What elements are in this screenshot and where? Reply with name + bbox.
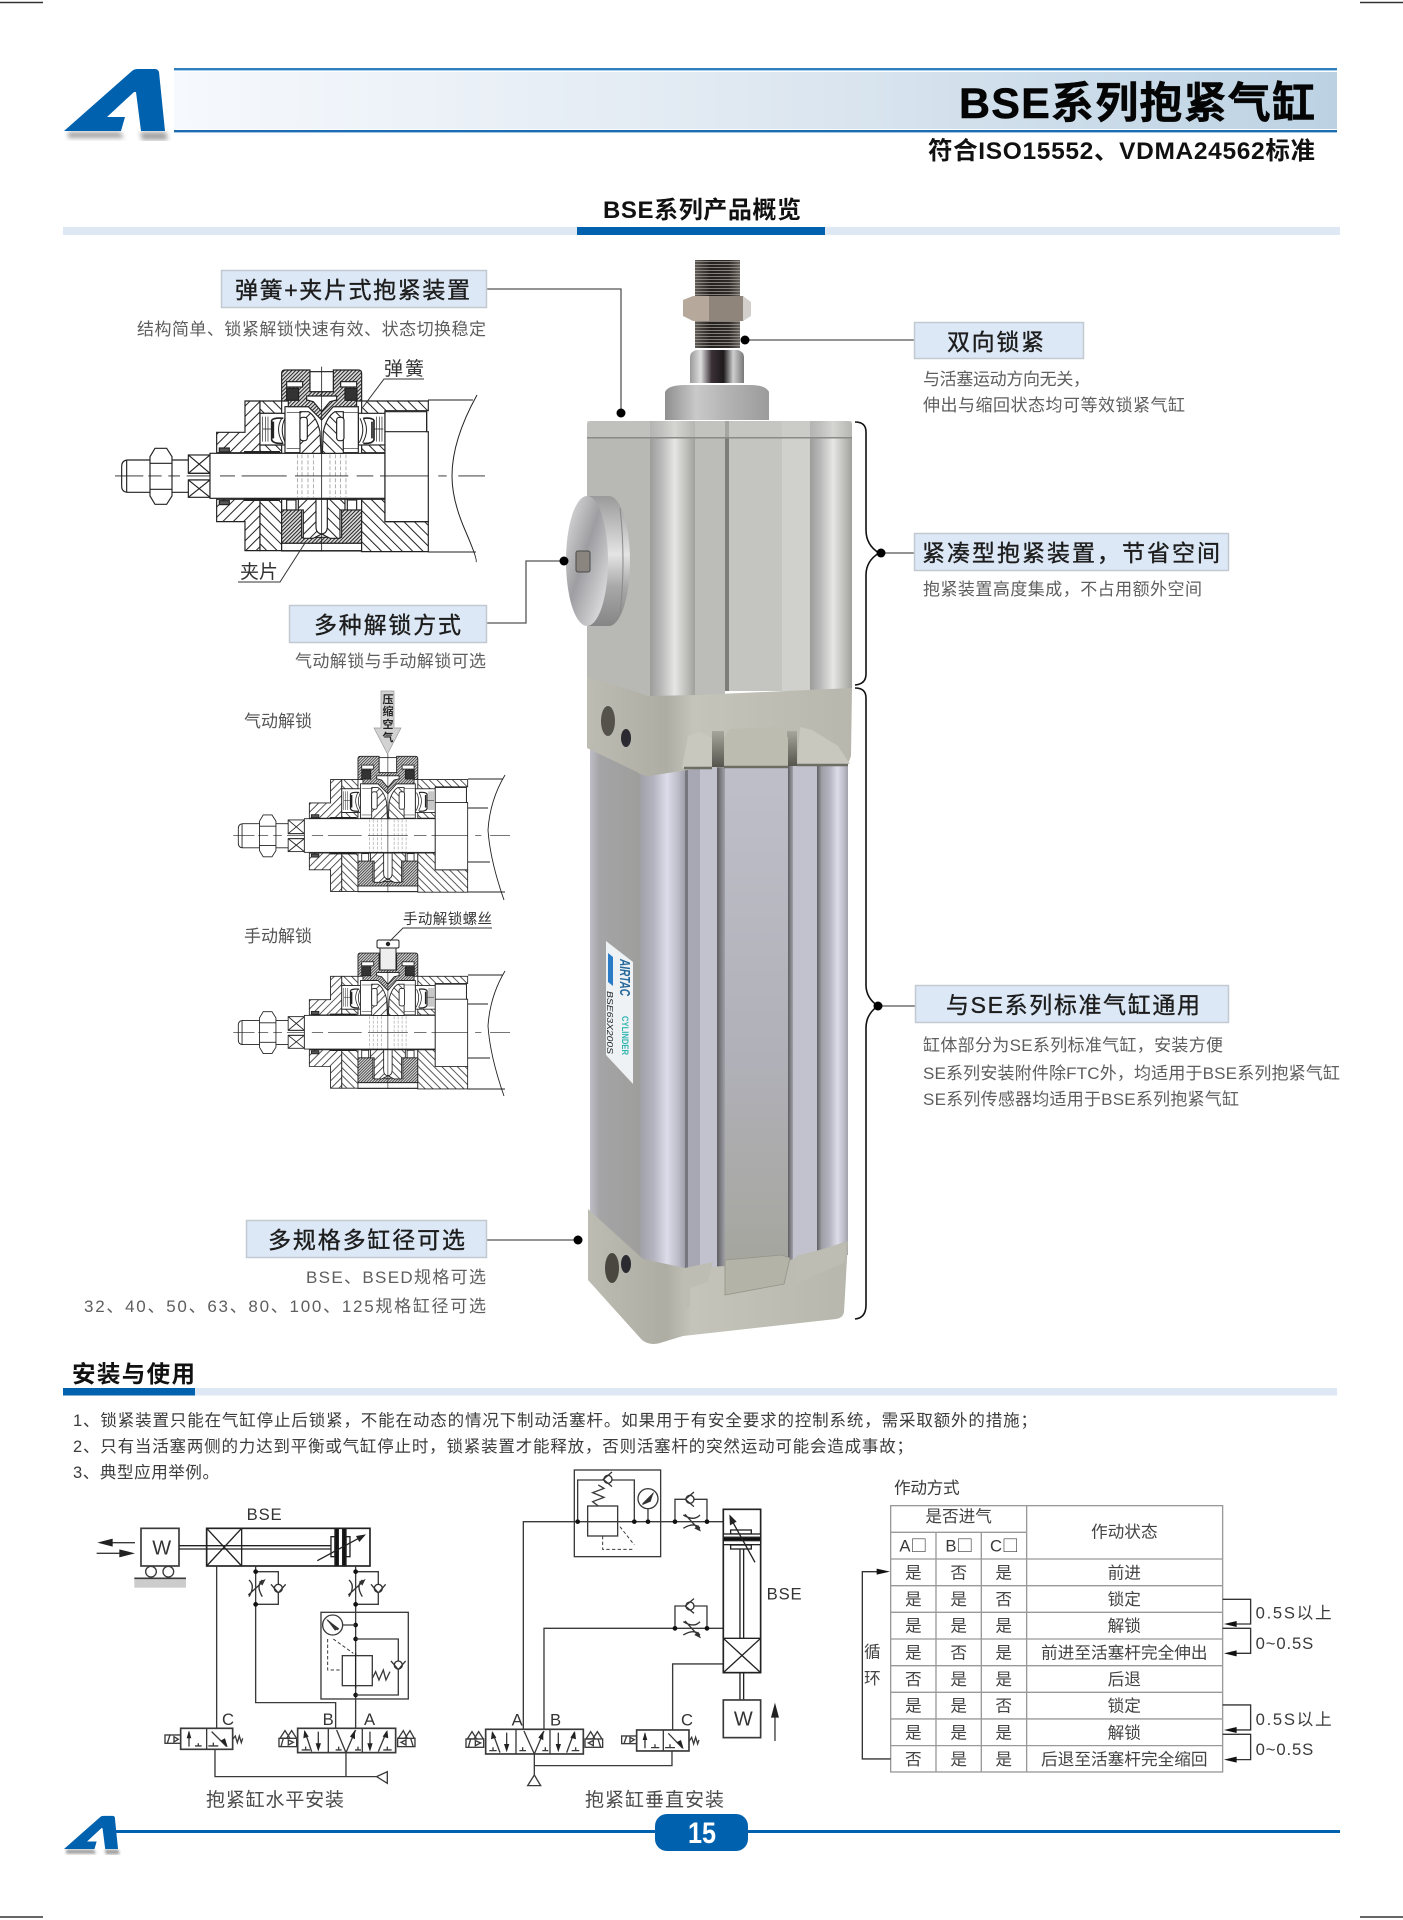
label: bidirectional locking	[914, 322, 1084, 358]
section drawing: manual unlock	[233, 911, 510, 1096]
section heading: product overview	[63, 197, 1340, 235]
compressed air arrow: 气	[382, 730, 394, 744]
timing labels: 0~0.5S	[1256, 1740, 1313, 1759]
leader: multiple bores	[486, 1236, 582, 1244]
label: multiple bores	[246, 1220, 486, 1258]
table rows: 否	[905, 1750, 922, 1769]
table rows: 是	[995, 1723, 1012, 1742]
load W: W	[734, 1709, 753, 1731]
label: compact clamp	[914, 534, 1228, 570]
upper body block	[587, 421, 852, 697]
tube break line	[428, 395, 477, 562]
table rows: 是	[950, 1617, 967, 1636]
labels A B C: C	[681, 1711, 693, 1730]
model label sticker	[605, 941, 633, 1084]
brand logo: A mark	[64, 69, 168, 140]
description: multiple bores	[84, 1268, 486, 1316]
3-way valve C	[622, 1730, 699, 1751]
load W	[723, 1700, 761, 1738]
subtitle: 符合ISO15552、VDMA24562标准	[928, 137, 1315, 165]
description: multiple bores: BSE、BSED规格可选	[306, 1268, 486, 1287]
leader: unlock handwheel	[487, 556, 568, 623]
table rows: 是	[995, 1563, 1012, 1582]
regulator unit	[321, 1612, 408, 1699]
callout: spring	[363, 358, 424, 407]
cylinder symbol	[179, 1528, 370, 1566]
description: spring clamp device: 结构简单、锁紧解锁快速有效、状态切换稳定	[137, 320, 486, 339]
section drawing: pneumatic unlock	[233, 691, 510, 900]
circuit diagram: vertical mounting	[466, 1470, 802, 1786]
table headers: 作动状态	[1091, 1523, 1158, 1542]
rod thread top	[695, 260, 740, 297]
compressed air arrow	[374, 691, 401, 754]
table headers: C□	[990, 1532, 1019, 1556]
table rows: 是	[905, 1563, 922, 1582]
section heading: installation and use: 安装与使用	[72, 1361, 195, 1387]
description: SE series compatible: SE系列安装附件除FTC外，均适用于BSE系列抱紧气缸	[923, 1063, 1340, 1083]
installation notes: 1、锁紧装置只能在气缸停止后锁紧，不能在动态的情况下制动活塞杆。如果用于有安全要求的控制系统，需采取额外的措施；	[73, 1410, 1037, 1430]
rod thread lower	[695, 321, 740, 348]
boss	[665, 385, 769, 420]
brace: clamp section	[855, 422, 914, 685]
table rows: 前进至活塞杆完全伸出	[1041, 1643, 1208, 1662]
motion arrow	[771, 1703, 779, 1741]
table rows: 后退	[1108, 1670, 1141, 1689]
cycle loop arrow: 环	[864, 1669, 881, 1688]
footer line	[115, 1830, 1340, 1833]
table rows: 解锁	[1108, 1617, 1141, 1636]
brace: cylinder section	[855, 688, 915, 1319]
description: SE series compatible: 缸体部分为SE系列标准气缸，安装方便	[923, 1035, 1223, 1055]
labels C B A: B	[323, 1710, 334, 1729]
table rows: 是	[995, 1670, 1012, 1689]
table headers: 是否进气	[925, 1507, 992, 1526]
table rows: 否	[995, 1697, 1012, 1716]
table rows: 是	[950, 1590, 967, 1609]
callout: spring: 弹簧	[384, 358, 424, 380]
description: compact clamp: 抱紧装置高度集成，不占用额外空间	[923, 580, 1202, 599]
table rows: 是	[905, 1643, 922, 1662]
table rows: 是	[905, 1590, 922, 1609]
leader: bidirectional locking	[740, 336, 914, 344]
table rows: 是	[905, 1723, 922, 1742]
bottom end cap	[588, 1209, 848, 1344]
labels C B A: A	[364, 1710, 376, 1729]
table headers: A□	[899, 1532, 927, 1556]
label: bidirectional locking: 双向锁紧	[947, 329, 1044, 355]
callout: clip	[238, 543, 305, 583]
caption: pneumatic unlock: 气动解锁	[244, 712, 312, 731]
actuation table	[862, 1478, 1332, 1772]
installation notes: 2、只有当活塞两侧的力达到平衡或气缸停止时，锁紧装置才能释放，否则活塞杆的突然运动可能会造成事故；	[73, 1436, 913, 1456]
5-way valve	[279, 1728, 415, 1753]
circuit diagram: horizontal mounting	[97, 1505, 415, 1783]
table rows: 否	[950, 1643, 967, 1662]
piping	[523, 1499, 723, 1730]
compressed air arrow: 缩	[382, 704, 394, 718]
title: BSE系列抱紧气缸	[959, 80, 1315, 128]
label: SE series compatible	[916, 986, 1228, 1022]
section heading: product overview: BSE系列产品概览	[603, 197, 801, 224]
timing labels: 0.5S以上	[1256, 1710, 1332, 1729]
timing labels: 0.5S以上	[1256, 1604, 1332, 1623]
chrome collar	[690, 350, 744, 383]
air supply	[215, 1749, 387, 1783]
labels C B A	[222, 1710, 376, 1729]
table rows: 是	[905, 1617, 922, 1636]
cycle loop arrow: 循	[864, 1642, 881, 1661]
description: bidirectional locking: 与活塞运动方向无关，	[923, 370, 1090, 389]
air supply	[528, 1751, 672, 1786]
timing brackets	[1223, 1599, 1251, 1763]
label BSE: BSE	[767, 1584, 802, 1603]
load W	[134, 1528, 186, 1588]
callout: manual unlock screw	[390, 911, 492, 941]
description: unlock methods: 气动解锁与手动解锁可选	[295, 652, 486, 671]
page number badge: 15	[688, 1817, 716, 1850]
model label sticker: CYLINDER	[620, 1016, 630, 1055]
label: spring clamp device	[222, 270, 486, 308]
table rows: 否	[905, 1670, 922, 1689]
table rows: 锁定	[1108, 1697, 1141, 1716]
product photo: cylinder	[566, 260, 852, 1344]
description: bidirectional locking	[923, 370, 1185, 415]
page number badge	[655, 1814, 748, 1851]
unlock handwheel	[566, 496, 630, 626]
table rows: 是	[950, 1723, 967, 1742]
labels C B A: C	[222, 1710, 234, 1729]
timing labels: 0~0.5S	[1256, 1634, 1313, 1653]
leader: spring clamp to cylinder	[487, 289, 626, 418]
table rows: 是	[995, 1643, 1012, 1662]
header banner	[174, 68, 1337, 132]
timing labels	[1256, 1604, 1332, 1759]
installation notes: 3、典型应用举例。	[73, 1463, 219, 1482]
table rows: 否	[995, 1590, 1012, 1609]
manual unlock screw	[377, 940, 399, 970]
table rows: 是	[905, 1697, 922, 1716]
caption: horizontal mounting: 抱紧缸水平安装	[206, 1789, 344, 1811]
table grid	[891, 1506, 1223, 1772]
description: SE series compatible: SE系列传感器均适用于BSE系列抱紧气缸	[923, 1089, 1239, 1109]
table title: 作动方式	[894, 1478, 960, 1497]
description: bidirectional locking: 伸出与缩回状态均可等效锁紧气缸	[923, 395, 1185, 415]
piping	[217, 1566, 378, 1728]
description: SE series compatible	[923, 1035, 1340, 1109]
labels A B C	[512, 1711, 693, 1730]
table rows: 是	[950, 1697, 967, 1716]
motion arrows	[97, 1539, 135, 1557]
tube break line	[468, 775, 505, 900]
table rows: 后退至活塞杆完全缩回	[1041, 1750, 1208, 1769]
labels A B C: A	[512, 1711, 524, 1730]
compressed air arrow: 空	[382, 717, 394, 731]
tube break line	[468, 971, 505, 1096]
regulator unit	[574, 1470, 661, 1557]
table rows: 否	[950, 1563, 967, 1582]
cylinder symbol	[723, 1509, 761, 1700]
table rows: 是	[950, 1670, 967, 1689]
section heading: installation and use	[63, 1361, 1337, 1396]
caption: manual unlock: 手动解锁	[244, 927, 312, 946]
label: unlock methods	[290, 606, 486, 642]
cylinder tube	[590, 745, 848, 1275]
model label sticker: AIRTAC	[616, 958, 633, 997]
compressed air arrow: 压	[382, 693, 394, 706]
label: spring clamp device: 弹簧+夹片式抱紧装置	[235, 277, 470, 303]
footer logo	[64, 1816, 120, 1854]
installation notes	[73, 1410, 1037, 1482]
table rows: 前进	[1108, 1563, 1141, 1582]
description: multiple bores: 32、40、50、63、80、100、125规格缸径可选	[84, 1296, 486, 1316]
rod nut	[683, 296, 751, 321]
caption: vertical mounting: 抱紧缸垂直安装	[585, 1789, 724, 1811]
middle end cap	[587, 677, 852, 776]
label: compact clamp: 紧凑型抱紧装置，节省空间	[922, 540, 1220, 566]
table rows: 是	[995, 1617, 1012, 1636]
label: multiple bores: 多规格多缸径可选	[268, 1227, 465, 1253]
table headers	[899, 1507, 1158, 1556]
3-way valve C	[165, 1728, 243, 1749]
callout: manual unlock screw: 手动解锁螺丝	[403, 911, 492, 928]
section drawing: clamp device	[115, 358, 485, 583]
label: SE series compatible: 与SE系列标准气缸通用	[946, 992, 1200, 1018]
callout: clip: 夹片	[240, 561, 278, 583]
label BSE: BSE	[247, 1505, 282, 1524]
table rows: 锁定	[1108, 1590, 1141, 1609]
5-way valve	[466, 1729, 603, 1754]
cycle loop arrow	[862, 1569, 891, 1759]
labels A B C: B	[550, 1711, 561, 1730]
table rows: 解锁	[1108, 1723, 1141, 1742]
label: unlock methods: 多种解锁方式	[314, 612, 461, 638]
table rows: 是	[950, 1750, 967, 1769]
table headers: B□	[945, 1532, 973, 1556]
table rows: 是	[995, 1750, 1012, 1769]
load W: W	[152, 1538, 171, 1560]
table rows	[905, 1563, 1208, 1769]
model label sticker: BSE63X200S	[605, 991, 614, 1055]
